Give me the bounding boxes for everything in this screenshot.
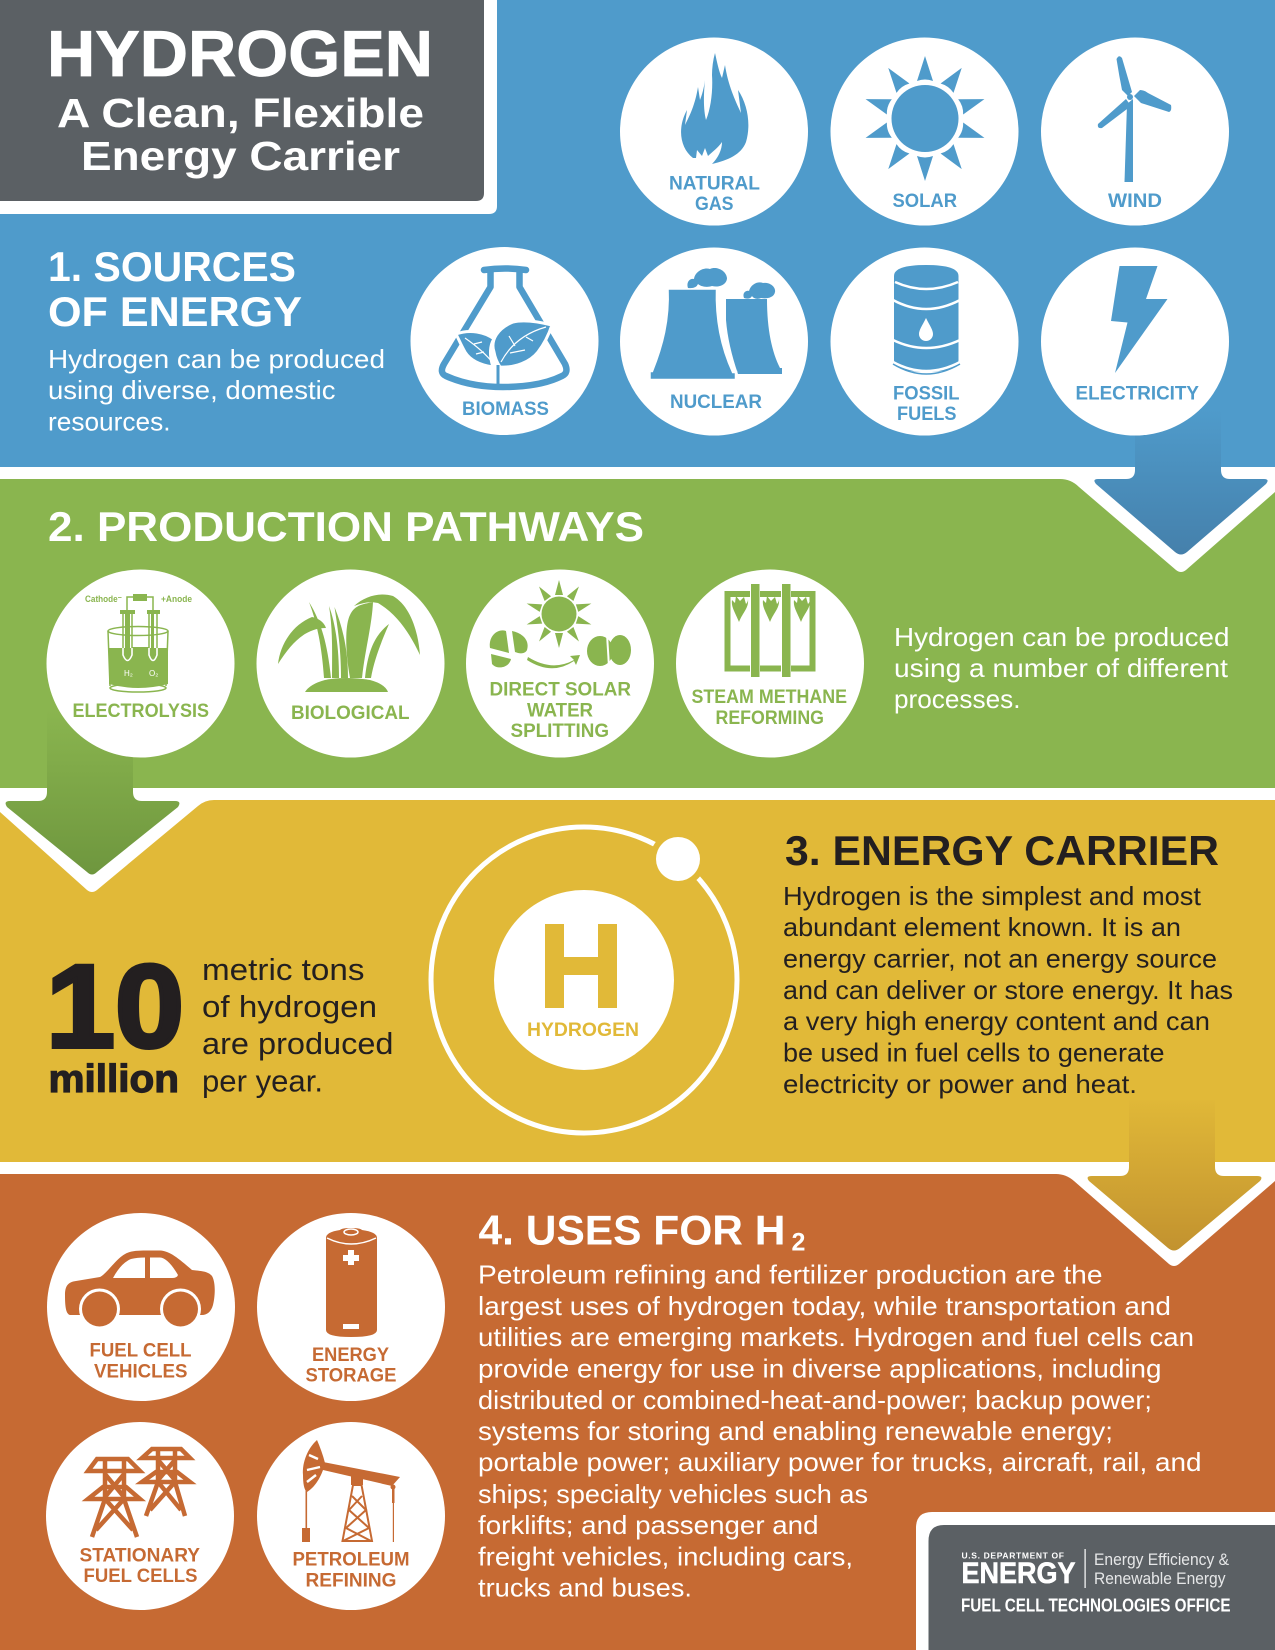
heading: uses for H2: 2: [792, 1228, 805, 1256]
body: production pathways: Hydrogen can be produced: [894, 622, 1230, 652]
icon: biological: BIOLOGICAL: [291, 702, 410, 724]
body: uses for H2: Petroleum refining and fertilizer production are the: [478, 1260, 1102, 1290]
panel: energy carrier background: [0, 800, 1275, 1162]
stat description: per year.: [202, 1064, 323, 1098]
body: uses for H2: provide energy for use in diverse applications, including: [478, 1354, 1162, 1384]
body: sources of energy: using diverse, domestic: [48, 375, 336, 405]
arrow: carrier to uses: [1088, 1100, 1261, 1250]
icon: hydrogen atom: HYDROGEN: [527, 1019, 639, 1041]
body: production pathways: [894, 622, 1230, 714]
icon: electrolysis: [46, 570, 234, 758]
stat description: [202, 952, 394, 1098]
body: energy carrier: a very high energy content and can: [783, 1006, 1210, 1036]
icon: fossil fuels: FUELS: [897, 403, 956, 425]
heading: sources of energy: [48, 243, 302, 335]
icon: energy storage: STORAGE: [306, 1364, 396, 1386]
icon: direct solar water splitting: WATER: [527, 700, 593, 722]
icon: stationary fuel cells: STATIONARY: [80, 1544, 200, 1566]
icon: petroleum refining: PETROLEUM: [292, 1548, 410, 1570]
body: energy carrier: be used in fuel cells to generate: [783, 1038, 1164, 1068]
icon: direct solar water splitting: DIRECT SOLAR: [490, 678, 631, 700]
icon: electrolysis: Cathode⁻: [85, 594, 122, 604]
icon: petroleum refining: [257, 1422, 445, 1610]
icon: fuel cell vehicles: [47, 1213, 235, 1401]
icon: fuel cell vehicles: FUEL CELL: [90, 1340, 192, 1362]
stat: 10 million: 10: [46, 941, 184, 1073]
body: energy carrier: abundant element known. It is an: [783, 912, 1181, 942]
icon: electrolysis: O₂: [149, 669, 158, 678]
title: Hydrogen: HYDROGEN: [47, 17, 433, 90]
icon: wind: [1041, 38, 1229, 226]
icon: biomass: BIOMASS: [462, 398, 549, 420]
body: uses for H2: systems for storing and enabling renewable energy;: [478, 1416, 1113, 1446]
logo panel: Department of Energy: Renewable Energy: [1094, 1569, 1226, 1588]
body: uses for H2: forklifts; and passenger and: [478, 1510, 818, 1540]
body: production pathways: processes.: [894, 684, 1020, 714]
icon: fuel cell vehicles: VEHICLES: [94, 1360, 188, 1382]
stat: 10 million: million: [48, 1058, 179, 1101]
arrow: production to carrier: [6, 710, 179, 874]
title block: [0, 0, 497, 214]
icon: natural gas: NATURAL: [669, 172, 760, 194]
icon: energy storage: [257, 1213, 445, 1401]
panel: uses for hydrogen background: [0, 1174, 1275, 1650]
subtitle line 2: Energy Carrier: [81, 133, 400, 179]
icon: stationary fuel cells: FUEL CELLS: [84, 1565, 198, 1587]
section 1 text: [48, 243, 385, 436]
icon: steam methane reforming: REFORMING: [716, 707, 824, 729]
icon: natural gas: GAS: [695, 193, 734, 215]
stat description: are produced: [202, 1026, 394, 1061]
heading: uses for H2: 4. USES FOR H: [478, 1206, 786, 1254]
stat description: metric tons: [202, 952, 364, 987]
icon: electrolysis: ELECTROLYSIS: [72, 700, 209, 722]
body: uses for H2: [478, 1260, 1202, 1602]
icon: solar: SOLAR: [892, 190, 957, 212]
icon: electricity: [1041, 248, 1229, 436]
subtitle line 1: A Clean, Flexible: [57, 90, 424, 136]
heading: sources of energy: 1. SOURCES: [48, 243, 296, 290]
panel: production pathways background: [0, 479, 1275, 788]
icon: electricity: ELECTRICITY: [1076, 382, 1199, 404]
icon: steam methane reforming: STEAM METHANE: [692, 686, 847, 708]
icon: direct solar water splitting: SPLITTING: [510, 720, 609, 742]
icon: stationary fuel cells: [46, 1422, 234, 1610]
body: energy carrier: [783, 881, 1233, 1099]
logo panel: Department of Energy: [916, 1512, 1275, 1650]
icon: biomass: [410, 247, 598, 435]
body: sources of energy: resources.: [48, 406, 170, 436]
body: uses for H2: trucks and buses.: [478, 1572, 692, 1602]
body: uses for H2: utilities are emerging markets. Hydrogen and fuel cells can: [478, 1322, 1194, 1352]
icon: nuclear: [620, 248, 808, 436]
icon: petroleum refining: REFINING: [306, 1570, 396, 1592]
logo panel: Department of Energy: Energy Efficiency &: [1094, 1550, 1230, 1569]
logo panel: Department of Energy: FUEL CELL TECHNOLOGIES OFFICE: [961, 1596, 1230, 1616]
icon: steam methane reforming: [676, 570, 864, 758]
icon: nuclear: NUCLEAR: [670, 391, 762, 413]
body: sources of energy: [48, 344, 385, 436]
heading: sources of energy: OF ENERGY: [48, 288, 302, 335]
stat description: of hydrogen: [202, 989, 377, 1024]
body: energy carrier: electricity or power and heat.: [783, 1069, 1137, 1099]
panel: sources of energy background: [0, 0, 1275, 467]
body: uses for H2: ships; specialty vehicles such as: [478, 1479, 868, 1509]
icon: electrolysis: H₂: [124, 669, 133, 678]
body: sources of energy: Hydrogen can be produced: [48, 344, 385, 374]
icon: electrolysis: +Anode: [161, 594, 192, 604]
body: energy carrier: Hydrogen is the simplest and most: [783, 881, 1202, 911]
icon: direct solar water splitting: [466, 570, 654, 758]
icon: solar: [830, 38, 1018, 226]
logo panel: Department of Energy: U.S. DEPARTMENT OF: [962, 1550, 1064, 1560]
arrow: sources to production: [1094, 410, 1268, 554]
logo panel: Department of Energy: ENERGY: [962, 1557, 1076, 1590]
icon: biological: [256, 570, 444, 758]
heading: production pathways: 2. PRODUCTION PATHWAYS: [48, 503, 644, 550]
body: uses for H2: distributed or combined-heat-and-power; backup power;: [478, 1385, 1152, 1415]
heading: energy carrier: 3. ENERGY CARRIER: [785, 827, 1219, 874]
body: uses for H2: largest uses of hydrogen today, while transportation and: [478, 1291, 1171, 1321]
body: uses for H2: portable power; auxiliary power for trucks, aircraft, rail, and: [478, 1447, 1202, 1477]
body: energy carrier: energy carrier, not an energy source: [783, 944, 1217, 974]
body: uses for H2: freight vehicles, including cars,: [478, 1542, 853, 1572]
icon: fossil fuels: FOSSIL: [893, 382, 960, 404]
icon: hydrogen atom: [431, 827, 737, 1133]
icon: natural gas: [620, 38, 808, 226]
icon: fossil fuels: [830, 248, 1018, 436]
body: production pathways: using a number of different: [894, 653, 1229, 683]
icon: wind: WIND: [1108, 190, 1162, 212]
body: energy carrier: and can deliver or store energy. It has: [783, 975, 1233, 1005]
icon: energy storage: ENERGY: [312, 1344, 389, 1366]
